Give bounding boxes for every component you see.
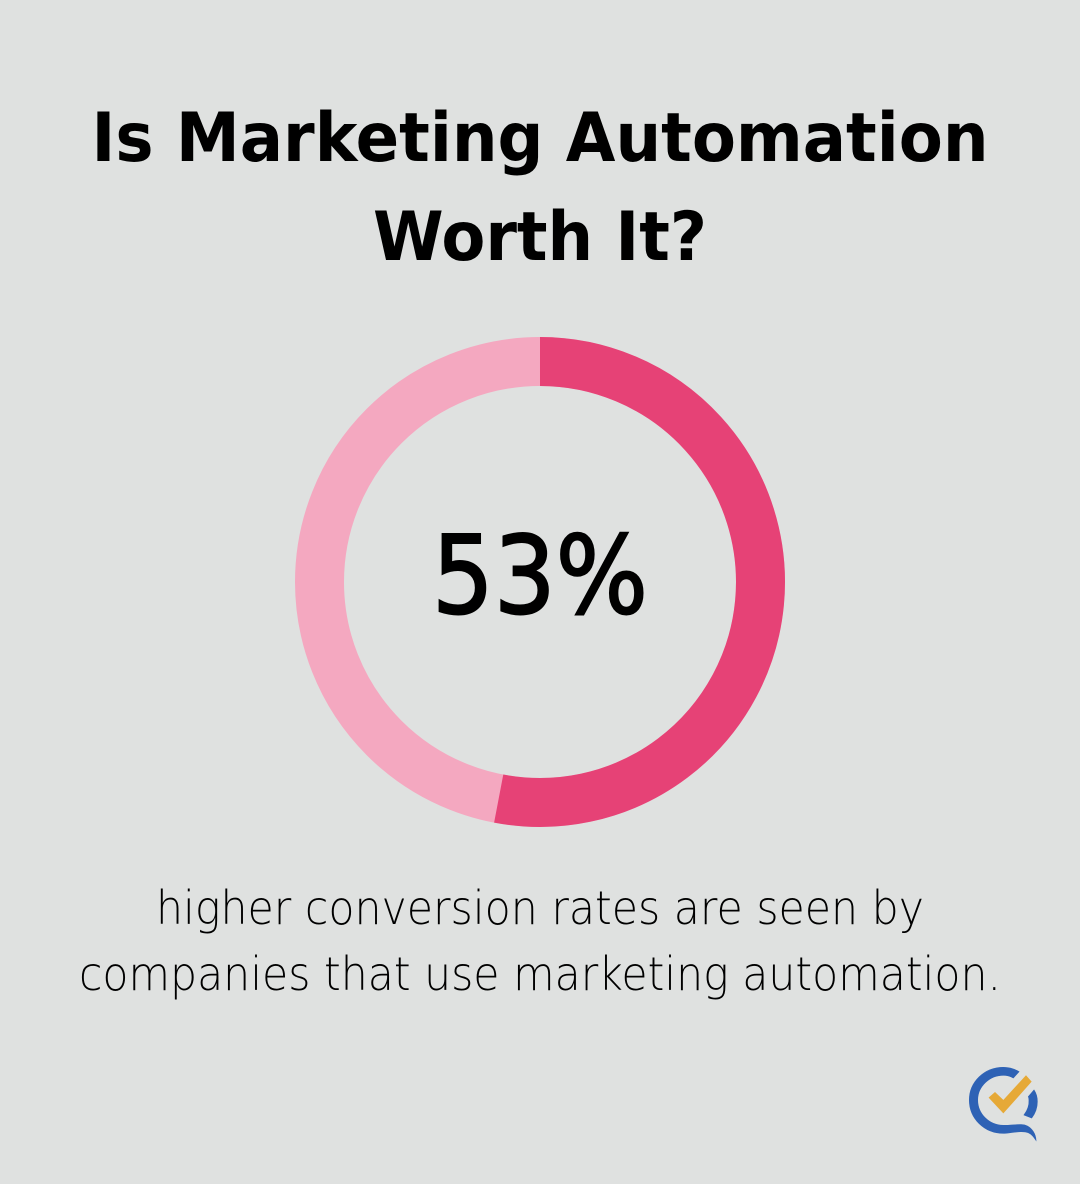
title: Worth It? bbox=[373, 198, 707, 277]
title bbox=[92, 99, 988, 277]
title: Is Marketing Automation bbox=[92, 99, 988, 178]
big number: 53%: 53% bbox=[432, 514, 648, 639]
description text: higher conversion rates are seen by bbox=[156, 881, 924, 935]
donut chart: 53% bbox=[320, 362, 760, 803]
description text: companies that use marketing automation. bbox=[79, 947, 1001, 1001]
description text bbox=[79, 881, 1001, 1001]
icon: logo speech bubble with check bbox=[969, 1067, 1037, 1140]
